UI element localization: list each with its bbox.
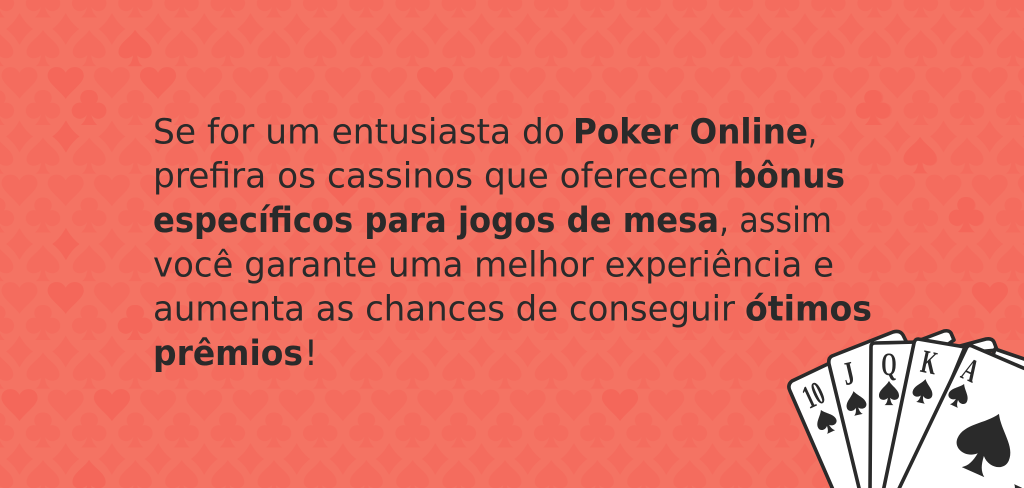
card Q: Q (881, 346, 897, 382)
large spade (947, 402, 1024, 484)
line 6: prêmios (153, 334, 303, 374)
card J (829, 331, 907, 488)
card K: K (918, 343, 941, 382)
line 2: bônus (733, 157, 845, 197)
card J: J (839, 355, 858, 393)
line 1: Se for um entusiasta do (153, 112, 565, 152)
line 1: Poker Online (573, 112, 808, 152)
line 1 (153, 112, 817, 152)
card 10 (789, 362, 864, 488)
card K (883, 339, 965, 488)
card A (896, 345, 1024, 488)
card 10: 10 (797, 374, 830, 416)
line 5: aumenta as chances de conseguir (153, 290, 736, 330)
text block (153, 112, 872, 374)
card A: A (956, 351, 985, 390)
line 1: , (808, 112, 817, 152)
line 6: ! (304, 334, 318, 374)
line 4: você garante uma melhor experiência e (153, 246, 834, 286)
small inverted spade (999, 482, 1024, 488)
line 5: ótimos (745, 290, 872, 330)
line 2: prefira os cassinos que oferecem (153, 157, 722, 197)
line 3: , assim (719, 201, 832, 241)
illustration: royal flush of spades (789, 331, 1024, 488)
back card edges (915, 331, 1024, 380)
card Q (870, 342, 918, 488)
line 3: específicos para jogos de mesa (153, 201, 719, 241)
